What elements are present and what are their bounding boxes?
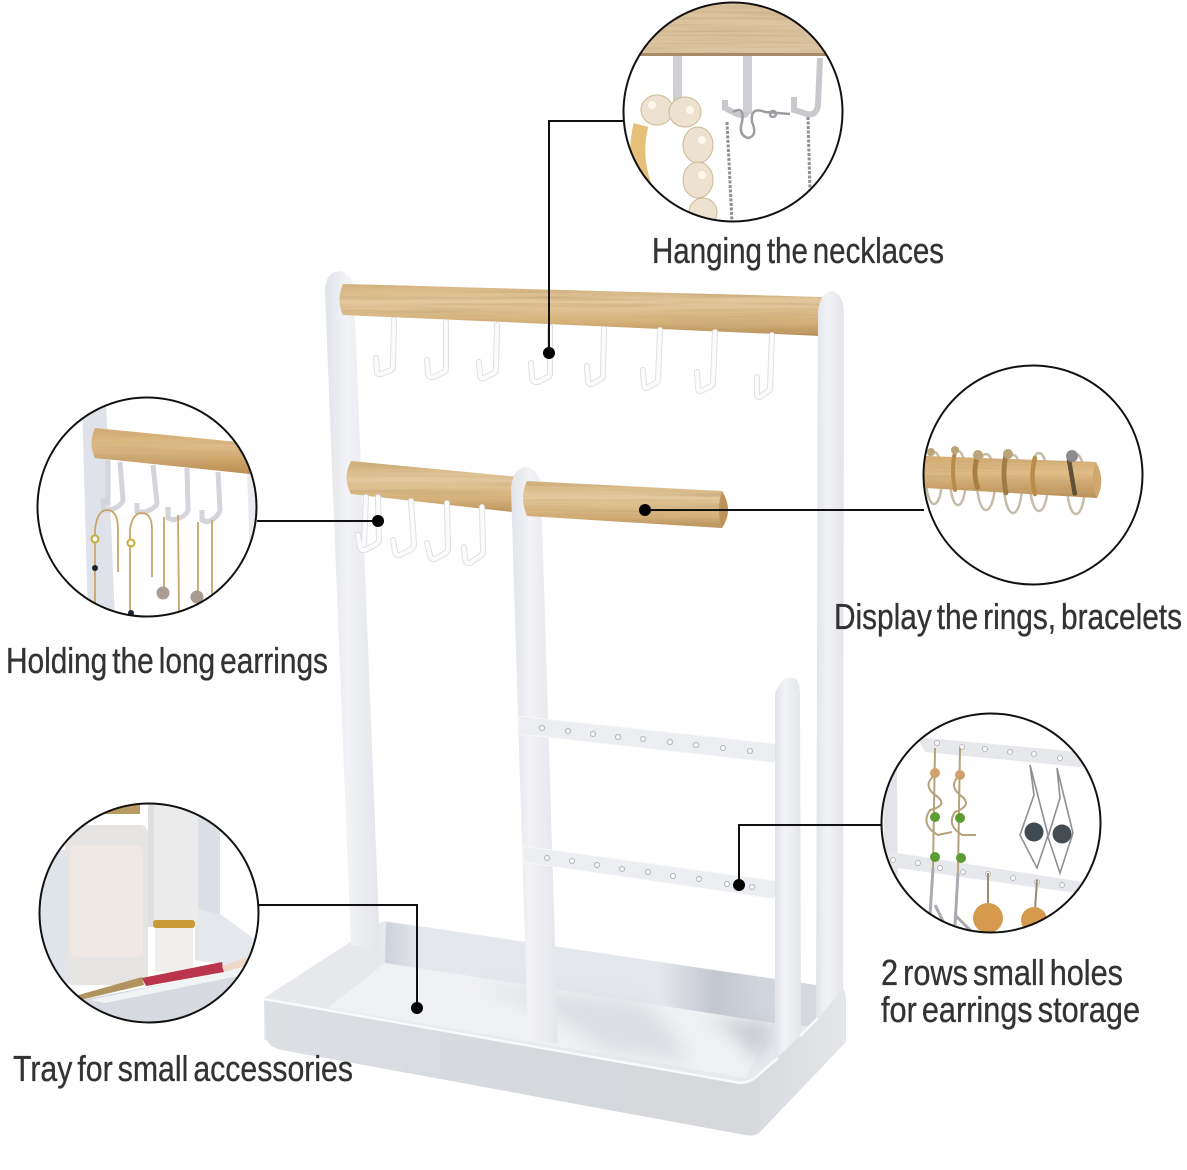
circle photo: tray [38,802,263,1030]
callout: long earrings [6,395,384,681]
wooden bar end cap [719,491,728,528]
circle photo: rings [920,365,1145,590]
dot: rings [639,504,651,516]
label: tray: Tray for small accessories [13,1048,353,1089]
circle photo: holes [880,712,1105,937]
right post [816,291,844,1030]
callout: earring holes: for earrings storage [881,989,1140,1030]
label: necklaces: Hanging the necklaces [652,230,944,271]
front segment of second wooden bar [523,481,728,528]
leader line: earrings [257,520,378,522]
leader line: tray [259,905,417,1008]
tray interior [264,921,843,1100]
dot: holes [733,879,745,891]
callout: necklaces [543,0,944,359]
dot: tray [411,1002,423,1014]
label: earrings: Holding the long earrings [6,640,328,681]
top wooden bar [340,284,824,336]
tray rim highlight [264,999,818,1083]
earring rails [518,716,777,899]
hooks [358,320,772,563]
label: holes: 2 rows small holes [881,952,1123,993]
circle photo: earrings [35,395,260,620]
callout: tray [13,802,423,1089]
circle photo: necklaces [620,0,850,230]
dot: necklaces [543,347,555,359]
short post [775,678,801,1066]
jewelry stand [264,271,846,1136]
leader line: rings [645,509,924,511]
left post [325,271,380,950]
first segment of second wooden bar [346,461,530,514]
dot: earrings [372,515,384,527]
leader line: holes [739,825,882,885]
leader line: necklaces [549,121,624,353]
centre post [511,467,558,1043]
callout: rings [639,365,1182,637]
callout: earring holes [733,712,1140,1030]
tray front wall [264,989,846,1136]
